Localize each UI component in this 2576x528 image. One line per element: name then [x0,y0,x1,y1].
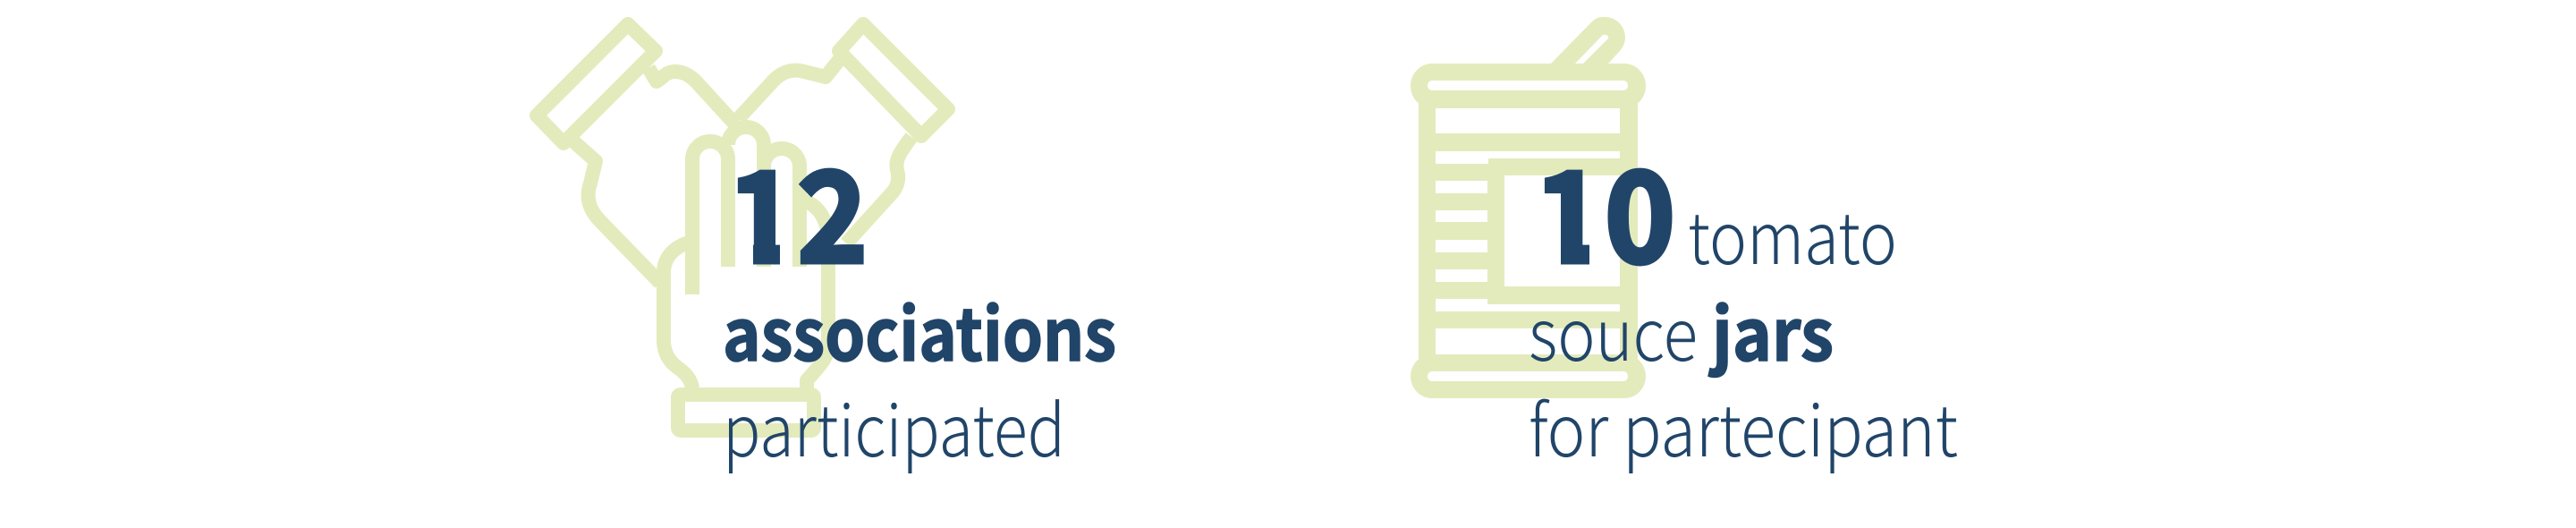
number 12: 12 [727,118,868,299]
left cuff [537,24,656,143]
word: souce: souce [1529,278,1698,382]
central hand [664,127,828,390]
hand base [678,395,814,430]
words: for partecipant: for partecipant [1529,374,1958,478]
icon: joined hands [537,24,948,430]
word: associations: associations [723,278,1116,382]
right arm [739,59,911,243]
top lid [1411,64,1646,108]
jar body [1419,98,1638,362]
word: jars: jars [1707,278,1834,382]
word: participated: participated [723,374,1065,478]
stat: 10 tomato souce jars for partecipant [1531,168,1957,473]
bottom lid [1411,354,1646,398]
left arm [572,68,735,283]
can opener tab [1551,17,1625,64]
right cuff [839,24,948,136]
number 10: 10 [1534,118,1675,299]
stat: 12 associations participated [725,168,1114,473]
jar white gaps and label [1428,81,1628,381]
word: tomato: tomato [1688,182,1897,285]
icon: tomato sauce jar [1411,17,1646,398]
